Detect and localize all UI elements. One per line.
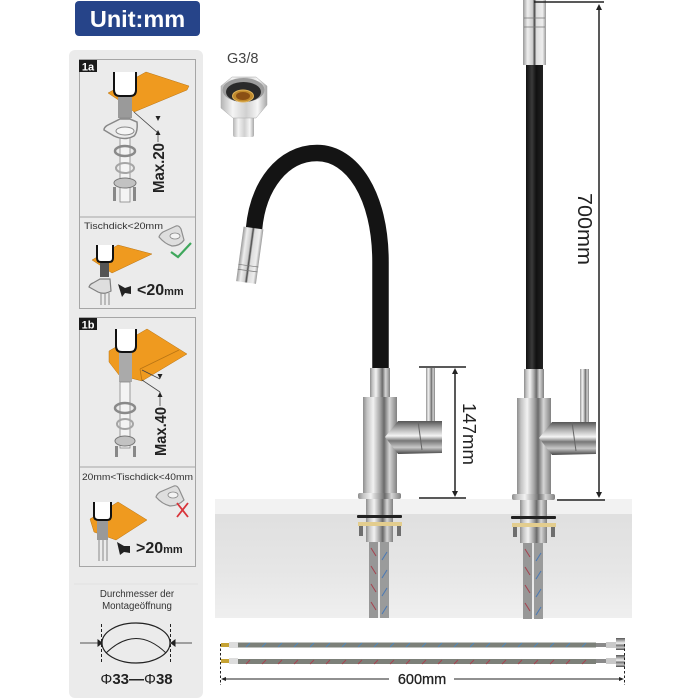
icon: G3/8 connector	[221, 77, 267, 137]
spout head	[236, 227, 263, 284]
hoses: two connection hoses	[221, 638, 625, 667]
diagram: thin countertop	[89, 245, 152, 305]
red hose	[221, 655, 625, 667]
dimension: 600mm	[220, 644, 624, 688]
label: hole diameter: Φ33—Φ38	[100, 671, 173, 688]
dimension: 700mm: 700mm	[573, 193, 595, 265]
diagram: mounting hole	[80, 623, 192, 663]
dimension: 147mm: 147mm	[459, 403, 479, 465]
label: under 20mm: <20mm	[137, 282, 184, 299]
caption: Tischdick under 20mm: Tischdick<20mm	[84, 221, 163, 232]
icon: correct bracket with check mark	[159, 226, 191, 257]
diagram 1a: countertop and mounting parts: Max.20	[151, 143, 168, 193]
dimension: 147mm	[419, 367, 479, 498]
caption: Tischdick 20 to 40mm: 20mm<Tischdick<40mm	[82, 472, 193, 483]
dimension: 600mm: 600mm	[398, 672, 446, 688]
faucet: bent gooseneck	[236, 153, 442, 618]
diagram 1a: countertop and mounting parts	[104, 72, 189, 202]
step 1b box: 1b	[82, 320, 95, 332]
countertop	[215, 499, 632, 618]
label: G3/8: G3/8	[227, 51, 258, 67]
straight spout head	[523, 0, 546, 65]
heading: Durchmesser der Montageoeffnung: Durchmesser der	[100, 589, 175, 600]
dimension: 700mm	[534, 2, 605, 500]
panel: installation instructions	[69, 50, 203, 698]
faucet: straight, fully extended	[511, 0, 596, 619]
step 1a box	[79, 60, 196, 308]
diagram 1b: thick countertop	[109, 329, 187, 457]
badge: Unit:mm: Unit:mm	[90, 6, 185, 32]
label: over 20mm: >20mm	[136, 540, 183, 557]
step 1b box	[79, 318, 196, 566]
icon: rejected bracket with cross	[156, 486, 188, 517]
badge: Unit:mm	[75, 1, 200, 36]
diagram 1b: thick countertop: Max.40	[153, 407, 170, 456]
blue hose	[221, 638, 625, 650]
step 1a box: 1a	[82, 62, 95, 74]
heading: Durchmesser der Montageoeffnung: Montageöffnung	[102, 601, 172, 612]
heading: Durchmesser der Montageoeffnung	[100, 589, 175, 612]
diagram: too-thick countertop	[90, 502, 147, 561]
